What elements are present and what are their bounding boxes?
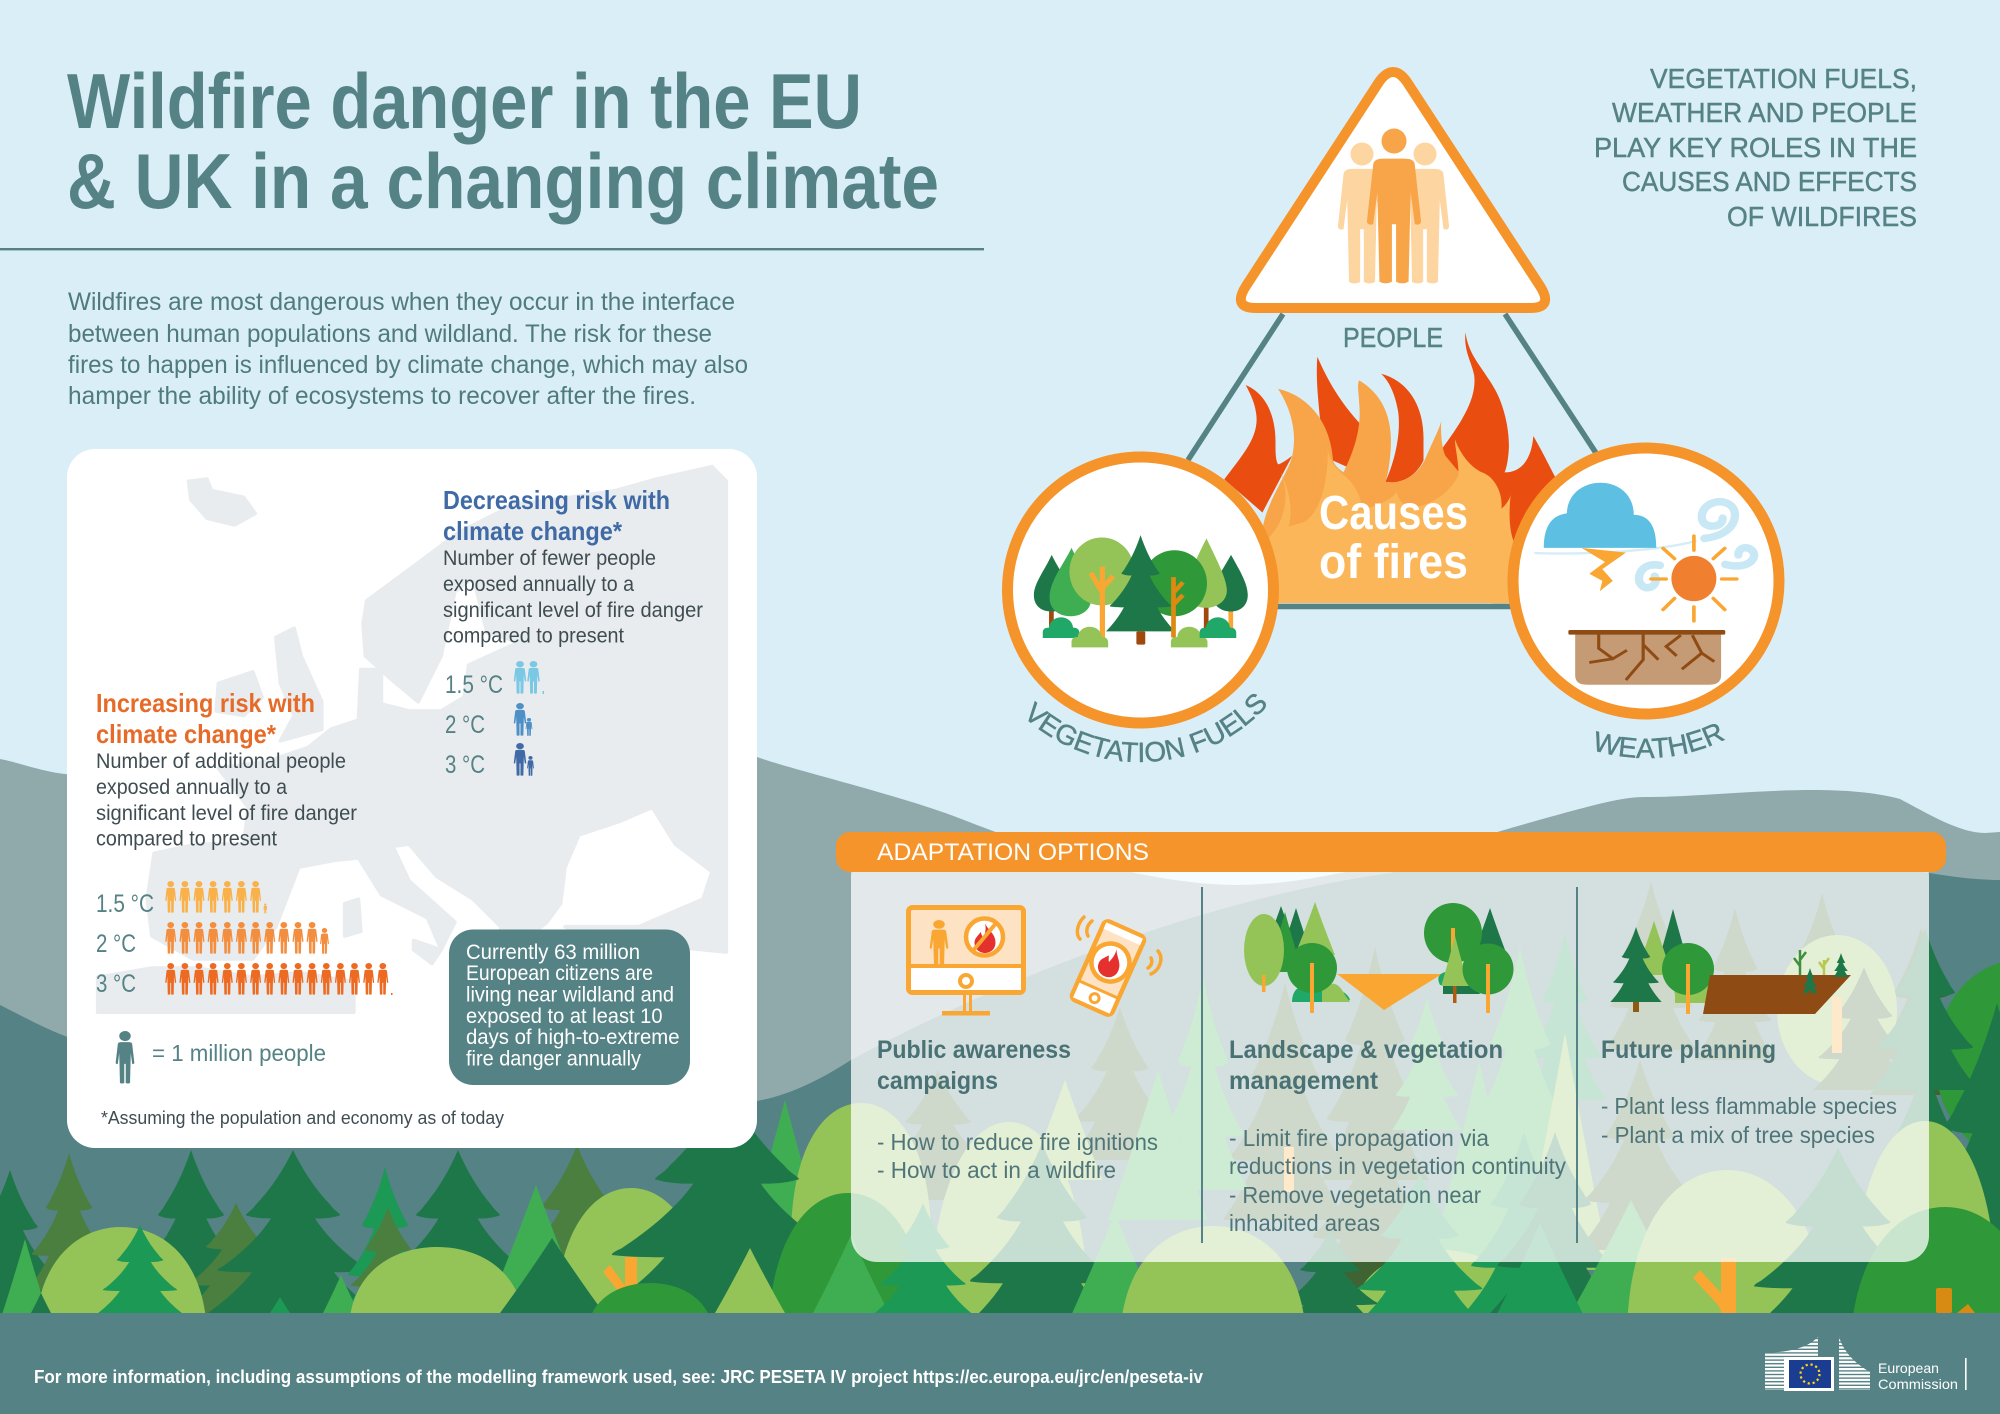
heading: future planning: Future planning bbox=[1601, 1036, 1776, 1064]
icon: monitor bbox=[908, 908, 1024, 1016]
circle: vegetation fuels bbox=[1008, 457, 1274, 723]
banner: adaptation options bbox=[836, 832, 1946, 872]
intro paragraph: fires to happen is influenced by climate change, which may also bbox=[68, 351, 748, 379]
callout: 63 million citizens: fire danger annually bbox=[466, 1048, 641, 1070]
tagline: VEGETATION FUELS, bbox=[1650, 63, 1917, 94]
middle row of trees bbox=[961, 1087, 2000, 1360]
intro paragraph: hamper the ability of ecosystems to recover after the fires. bbox=[68, 382, 696, 410]
icon: future planting bbox=[1610, 909, 1851, 1014]
intro paragraph: between human populations and wildland. The risk for these bbox=[68, 320, 712, 348]
footer source text: For more information, including assumptions of the modelling framework used, see: JRC PESETA IV project https://ec.europa.eu/jrc/en/peseta-iv bbox=[34, 1366, 1204, 1387]
text: landscape list: - Limit fire propagation via bbox=[1229, 1125, 1489, 1151]
text: landscape list: reductions in vegetation continuity bbox=[1229, 1153, 1566, 1179]
chart: decreasing risk pictogram: 1.5 °C bbox=[445, 671, 503, 699]
teal mountains bbox=[0, 859, 2000, 1320]
tagline: PLAY KEY ROLES IN THE bbox=[1594, 132, 1917, 163]
text: future planning list: - Plant a mix of tree species bbox=[1601, 1122, 1875, 1148]
label: weather: WEATHER bbox=[1596, 724, 1726, 758]
callout: 63 million citizens bbox=[449, 930, 690, 1085]
label: people: PEOPLE bbox=[1343, 322, 1443, 353]
callout: 63 million citizens: living near wildland and bbox=[466, 984, 674, 1006]
flames bbox=[1224, 332, 1555, 603]
text: increasing risk description: compared to present bbox=[96, 828, 277, 850]
front left trees bbox=[0, 1090, 971, 1345]
title: & UK in a changing climate bbox=[67, 137, 939, 225]
column: landscape and vegetation management bbox=[1229, 902, 1566, 1236]
icon: phone bbox=[1070, 917, 1161, 1016]
heading: causes of fires bbox=[1319, 487, 1468, 589]
intro paragraph: Wildfires are most dangerous when they occur in the interface bbox=[68, 288, 735, 316]
panel: adaptation options bbox=[836, 832, 1946, 1262]
callout: 63 million citizens: exposed to at least 10 bbox=[466, 1005, 662, 1028]
heading: causes of fires: of fires bbox=[1319, 536, 1468, 589]
chart: increasing risk pictogram: 3 °C bbox=[96, 970, 136, 998]
chart: increasing risk pictogram bbox=[96, 881, 392, 998]
intro paragraph bbox=[68, 288, 748, 410]
tagline bbox=[1594, 63, 1917, 232]
heading: increasing risk: climate change* bbox=[96, 719, 277, 749]
chart: decreasing risk pictogram: 3 °C bbox=[445, 751, 485, 779]
icon: fuel break bbox=[1244, 902, 1514, 1013]
icon: weather bbox=[1534, 483, 1754, 685]
text: increasing risk description: Number of additional people bbox=[96, 750, 346, 773]
logo: European Commission bbox=[1765, 1337, 1967, 1392]
heading: public awareness bbox=[877, 1036, 1071, 1095]
heading: public awareness: campaigns bbox=[877, 1067, 998, 1095]
title bbox=[67, 57, 939, 225]
label: vegetation fuels: VEGETATION FUELS bbox=[1028, 694, 1266, 762]
callout: 63 million citizens: days of high-to-extreme bbox=[466, 1026, 680, 1049]
connecting triangle lines bbox=[1188, 314, 1596, 606]
map of Europe bbox=[98, 467, 726, 1012]
footnote: *Assuming the population and economy as of today bbox=[101, 1108, 504, 1128]
legend: 1 million people: = 1 million people bbox=[152, 1040, 326, 1066]
grey mountains bbox=[0, 753, 2000, 1320]
callout: 63 million citizens: European citizens are bbox=[466, 962, 653, 985]
text: decreasing risk description: Number of fewer people bbox=[443, 547, 656, 570]
forest bbox=[0, 882, 2000, 1360]
text: decreasing risk description: compared to present bbox=[443, 624, 624, 648]
diagram: causes of fires bbox=[1002, 67, 1784, 762]
heading: decreasing risk: Decreasing risk with bbox=[443, 485, 670, 515]
text: increasing risk description: exposed annually to a bbox=[96, 776, 287, 799]
tagline: OF WILDFIRES bbox=[1727, 201, 1917, 232]
heading: landscape: management bbox=[1229, 1067, 1379, 1095]
text: increasing risk description: significant level of fire danger bbox=[96, 802, 357, 825]
text: increasing risk description bbox=[96, 750, 357, 850]
legend: 1 million people bbox=[116, 1031, 326, 1083]
logo: European Commission: European bbox=[1878, 1360, 1939, 1376]
banner: adaptation options: ADAPTATION OPTIONS bbox=[877, 839, 1149, 866]
column: public awareness campaigns bbox=[877, 908, 1161, 1183]
icon: forest bbox=[1034, 535, 1248, 647]
title: Wildfire danger in the EU bbox=[67, 57, 862, 145]
text: future planning list bbox=[1601, 1093, 1897, 1148]
heading: decreasing risk bbox=[443, 485, 670, 546]
chart: increasing risk pictogram: 2 °C bbox=[96, 930, 136, 958]
heading: landscape: Landscape & vegetation bbox=[1229, 1036, 1503, 1064]
chart: decreasing risk pictogram: 2 °C bbox=[445, 711, 485, 739]
heading: decreasing risk: climate change* bbox=[443, 516, 623, 546]
logo: European Commission: Commission bbox=[1878, 1376, 1958, 1392]
text: landscape list: - Remove vegetation near bbox=[1229, 1182, 1481, 1208]
text: public awareness list: - How to reduce fire ignitions bbox=[877, 1129, 1158, 1155]
heading: increasing risk bbox=[96, 688, 315, 749]
chart: increasing risk pictogram: 1.5 °C bbox=[96, 890, 154, 918]
circle: weather bbox=[1513, 448, 1779, 714]
heading: increasing risk: Increasing risk with bbox=[96, 688, 315, 718]
panel: risk map card bbox=[67, 449, 757, 1148]
heading: landscape bbox=[1229, 1036, 1503, 1095]
text: future planning list: - Plant less flammable species bbox=[1601, 1093, 1897, 1119]
back row of trees bbox=[879, 882, 2000, 1330]
triangle: people bbox=[1241, 72, 1545, 308]
chart: decreasing risk pictogram bbox=[445, 661, 544, 779]
text: landscape list: inhabited areas bbox=[1229, 1210, 1380, 1236]
heading: causes of fires: Causes bbox=[1319, 487, 1468, 540]
footer band bbox=[0, 1313, 2000, 1414]
text: decreasing risk description bbox=[443, 547, 703, 648]
text: decreasing risk description: significant level of fire danger bbox=[443, 599, 703, 622]
text: landscape list bbox=[1229, 1125, 1566, 1236]
callout: 63 million citizens: Currently 63 million bbox=[466, 941, 640, 964]
tagline: WEATHER AND PEOPLE bbox=[1612, 97, 1917, 128]
column: future planning bbox=[1601, 909, 1897, 1148]
text: public awareness list bbox=[877, 1129, 1158, 1183]
tagline: CAUSES AND EFFECTS bbox=[1622, 166, 1917, 197]
label: weather bbox=[1596, 724, 1726, 758]
heading: public awareness: Public awareness bbox=[877, 1036, 1071, 1064]
text: public awareness list: - How to act in a wildfire bbox=[877, 1157, 1116, 1183]
title rule bbox=[0, 248, 984, 250]
text: decreasing risk description: exposed annually to a bbox=[443, 573, 634, 596]
icon: people bbox=[1338, 128, 1449, 284]
